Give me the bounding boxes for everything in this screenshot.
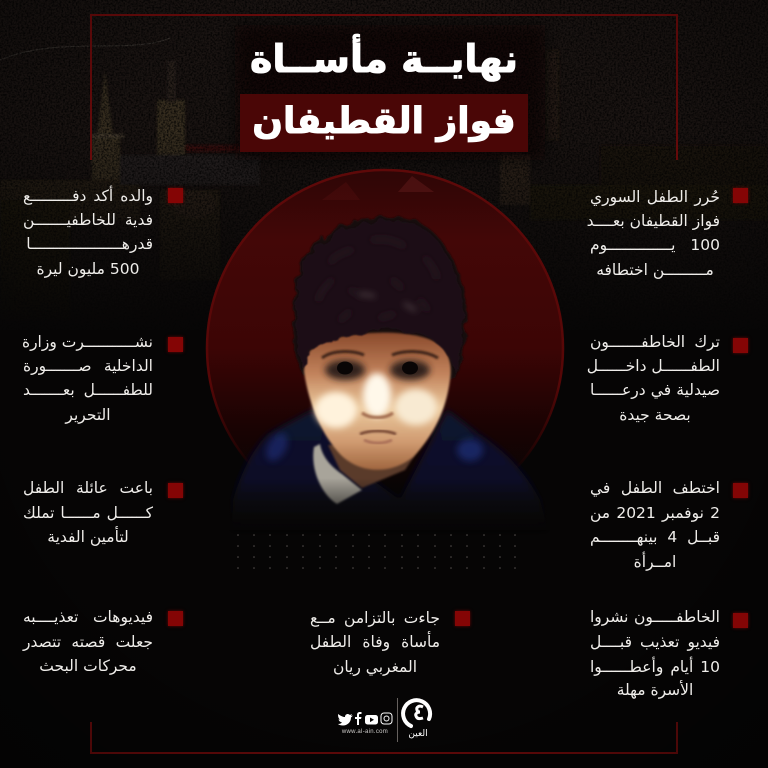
marker [733, 483, 748, 498]
right item 1: freed [587, 188, 720, 279]
icon: youtube [365, 715, 378, 724]
right item 4: torture video: الأسرة مهلة [617, 681, 693, 699]
right item 4: torture video: الخاطفـــــون نشروا [590, 608, 720, 626]
right item 2: left in pharmacy: الطفــــــل داخــــــل [587, 357, 720, 375]
boy portrait [220, 217, 560, 530]
title line 2 on dark red banner [240, 94, 528, 152]
icon: twitter [338, 714, 353, 726]
left item 2: ministry: للطفــــــل بعـــــــد [23, 381, 153, 399]
left item 3: family sold [23, 479, 153, 546]
nose shadow [362, 413, 393, 418]
right item 2: left in pharmacy [587, 333, 720, 424]
right item 4: torture video: فيديو تعذيب قبــــل [590, 633, 720, 651]
right item 4: torture video [590, 608, 720, 699]
left item 2: ministry [22, 333, 153, 424]
left item 4: videos: فيديوهات تعذيــــبه [23, 608, 153, 626]
mouth [360, 431, 396, 434]
hair back [292, 217, 467, 378]
marker [733, 338, 748, 353]
marker [455, 611, 470, 626]
right item 3: kidnapped [590, 479, 720, 571]
face [304, 333, 451, 470]
right item 3: kidnapped: 2 نوفمبر 2021 من [590, 504, 720, 522]
title line 2 on dark red banner: فواز القطيفان [252, 101, 516, 142]
left item 1: ransom: فدية للخاطفيـــــــن [23, 211, 153, 229]
right item 2: left in pharmacy: بصحة جيدة [619, 406, 691, 424]
right item 2: left in pharmacy: صيدلية في درعــــــا [590, 381, 720, 399]
right item 3: kidnapped: اختطف الطفل في [590, 479, 720, 497]
icon: facebook [355, 712, 362, 725]
right item 1: freed: فواز القطيفان بعــــد [587, 212, 720, 230]
red circle [207, 170, 563, 526]
left item 4: videos: محركات البحث [39, 657, 137, 675]
left item 2: ministry: الداخلية صـــــــورة [23, 357, 153, 375]
marker [168, 188, 183, 203]
fringe [295, 220, 463, 375]
left item 3: family sold: لتأمين الفدية [47, 528, 129, 546]
right item 1: freed: مـــــــــن اختطافه [596, 261, 714, 279]
neck [328, 440, 425, 488]
jacket [232, 410, 548, 530]
left item 3: family sold: كــــــل مــــــا تملك [23, 504, 153, 522]
left item 1: ransom [23, 186, 153, 278]
hair highlights [318, 239, 437, 320]
right item 3: kidnapped: امــرأة [634, 553, 676, 571]
center item: Rayan: جاءت بالتزامن مــع [310, 609, 440, 627]
center item: Rayan: المغربي ريان [333, 658, 417, 676]
right item 1: freed: 100 يــــــــــــــوم [590, 236, 720, 254]
marker [733, 188, 748, 203]
white cheek glow [315, 392, 357, 428]
left item 2: ministry: نشـــــــــــرت وزارة [22, 333, 153, 351]
dot grid [237, 534, 516, 569]
marker [168, 483, 183, 498]
social icons and website [338, 712, 392, 735]
left item 4: videos: جعلت قصته تتصدر [23, 633, 153, 651]
shirt collar [313, 444, 362, 504]
center item: Rayan: مأساة وفاة الطفل [310, 633, 440, 651]
left item 2: ministry: التحرير [65, 406, 111, 424]
logo: Al-Ain [397, 698, 432, 742]
left item 3: family sold: باعت عائلة الطفل [23, 479, 153, 497]
marker [168, 337, 183, 352]
center item: Rayan [310, 609, 440, 676]
left item 1: ransom: قدرهــــــــــــــــــــا [26, 235, 153, 253]
left item 4: videos [22, 608, 153, 675]
dark eye sockets [325, 360, 365, 380]
title line 1: نهايــة مأســاة [250, 37, 518, 81]
icon: instagram [381, 713, 392, 724]
right item 4: torture video: 10 أيام وأعطــــــوا [590, 658, 720, 676]
logo: Al-Ain: العين [408, 729, 428, 739]
left item 1: ransom: والده أكد دفـــــــــع [23, 187, 153, 205]
right item 1: freed: حُرر الطفل السوري [590, 188, 720, 206]
left item 1: ransom: 500 مليون ليرة [36, 260, 140, 278]
marker [733, 613, 748, 628]
marker [168, 611, 183, 626]
bottom fade [220, 478, 560, 530]
right item 2: left in pharmacy: ترك الخاطفـــــــون [590, 333, 720, 351]
social icons and website: www.al-ain.com [342, 729, 388, 735]
right item 3: kidnapped: قبــل 4 بينهــــــــم [590, 528, 720, 546]
brows [322, 352, 364, 358]
